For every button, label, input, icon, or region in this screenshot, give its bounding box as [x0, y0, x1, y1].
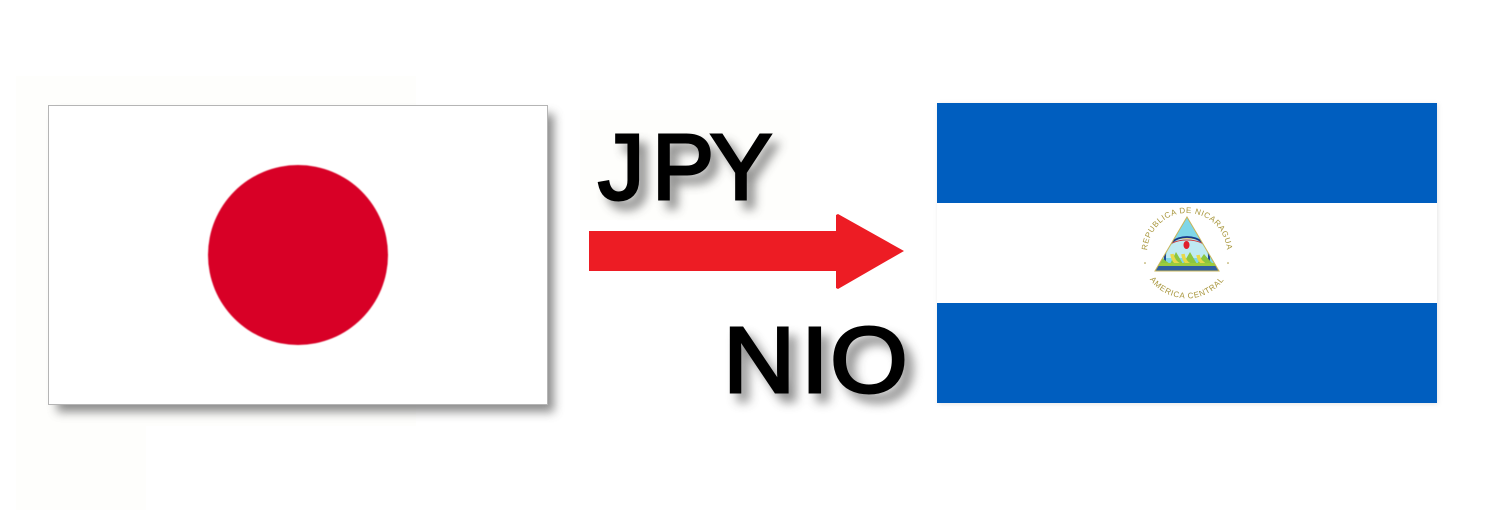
emblem triangle: [1156, 218, 1218, 270]
emblem side dots: [1144, 262, 1229, 264]
currency label NIO: NIO: [723, 309, 908, 412]
currency label JPY: JPY: [606, 124, 780, 228]
emblem ring text: REPUBLICA DE NICARAGUA: [1142, 207, 1232, 250]
currency label NIO: NIO: [731, 318, 916, 421]
red sun disc: [208, 165, 388, 345]
emblem lower text: AMERICA CENTRAL: [1150, 278, 1224, 298]
Nicaragua flag: [937, 103, 1439, 405]
currency label JPY: JPY: [598, 115, 772, 219]
red arrow: [589, 214, 904, 289]
national emblem: [1142, 207, 1232, 298]
red cap: [1184, 241, 1190, 249]
Japan flag: [48, 106, 554, 412]
